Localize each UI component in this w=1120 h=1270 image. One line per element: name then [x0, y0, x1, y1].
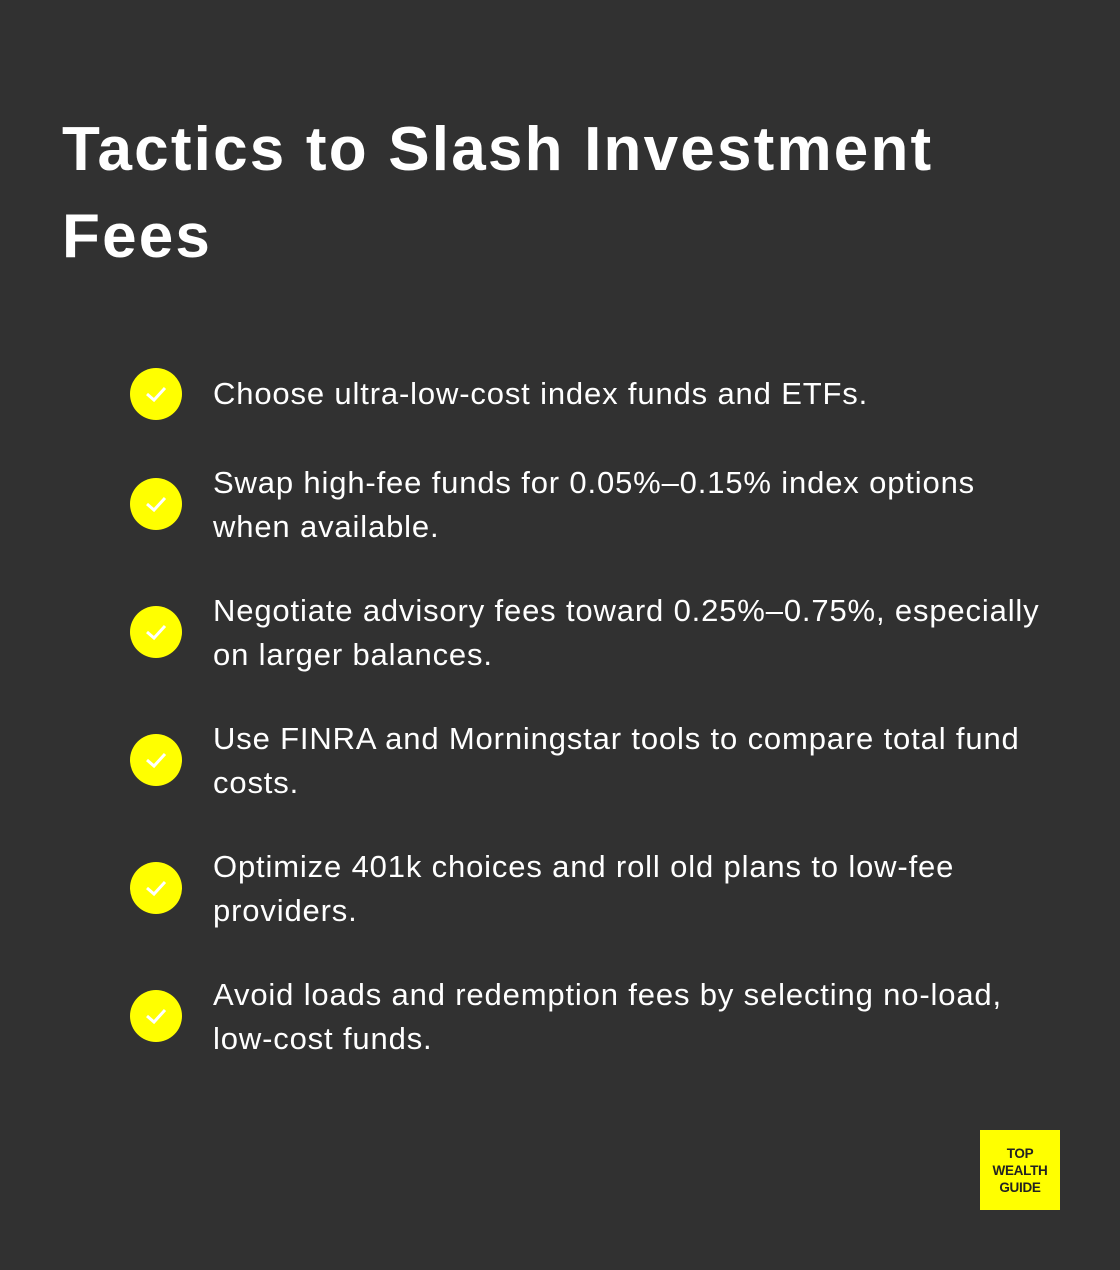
title: Fees: [62, 202, 212, 271]
text: Avoid loads and redemption fees by selecting no-load,: [213, 977, 1002, 1012]
text: [213, 721, 1020, 800]
icon: check: [130, 368, 182, 420]
icon: check: [130, 478, 182, 530]
text: providers.: [213, 893, 358, 928]
icon: check: [130, 862, 182, 914]
text: Swap high-fee funds for 0.05%–0.15% index options: [213, 465, 975, 500]
icon: check: [130, 734, 182, 786]
icon: check: [130, 606, 182, 658]
text: Optimize 401k choices and roll old plans to low-fee: [213, 849, 954, 884]
logo: GUIDE: [999, 1180, 1041, 1194]
text: Choose ultra-low-cost index funds and ETFs.: [213, 376, 868, 411]
logo: WEALTH: [993, 1162, 1047, 1178]
text: [213, 593, 1040, 672]
item 3: [130, 593, 1040, 672]
text: costs.: [213, 765, 299, 800]
text: when available.: [213, 509, 439, 544]
logo: TOP: [1007, 1146, 1033, 1160]
icon: check: [130, 990, 182, 1042]
text: [213, 465, 975, 544]
text: low-cost funds.: [213, 1021, 433, 1056]
text: Negotiate advisory fees toward 0.25%–0.75%, especially: [213, 593, 1040, 628]
item 1: [130, 368, 868, 420]
text: on larger balances.: [213, 637, 493, 672]
title: Tactics to Slash Investment: [62, 115, 933, 184]
logo: [980, 1130, 1060, 1210]
item 4: [130, 721, 1020, 800]
title: [62, 115, 933, 271]
item 5: [130, 849, 954, 928]
text: Use FINRA and Morningstar tools to compare total fund: [213, 721, 1020, 756]
text: [213, 849, 954, 928]
text: [213, 977, 1002, 1056]
item 6: [130, 977, 1002, 1056]
item 2: [130, 465, 975, 544]
